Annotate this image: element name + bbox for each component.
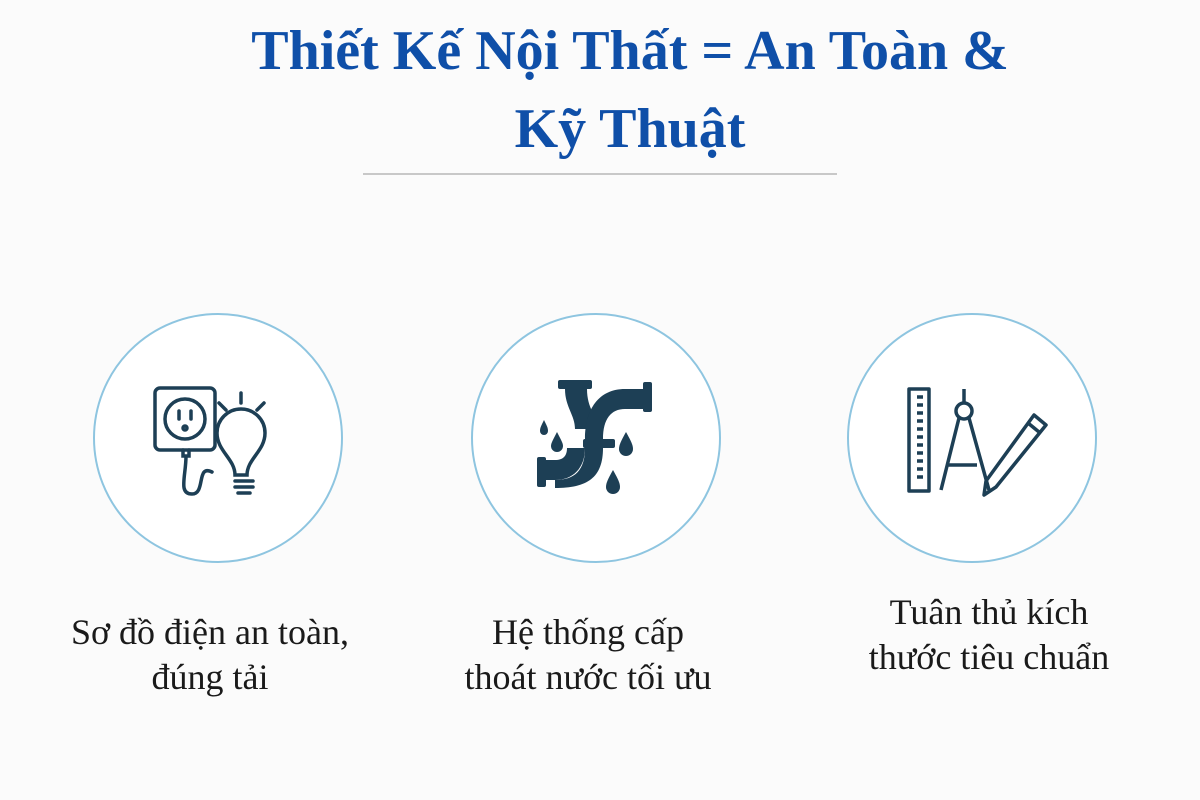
label: electrical <box>71 612 349 697</box>
title: Thiết Kế Nội Thất = An Toàn & <box>251 20 1009 82</box>
panel: electrical <box>93 313 343 563</box>
label: plumbing <box>464 612 712 697</box>
panel: plumbing <box>471 313 721 563</box>
icon: pipes with drops <box>537 380 652 494</box>
icon: ruler compass pencil <box>907 387 1048 497</box>
label: measurements <box>869 592 1109 677</box>
title: Kỹ Thuật <box>515 98 745 160</box>
panel: measurements <box>847 313 1097 563</box>
label: plumbing: Hệ thống cấp <box>492 612 684 652</box>
icon: socket and bulb <box>153 386 267 496</box>
label: measurements: Tuân thủ kích <box>890 592 1088 632</box>
label: measurements: thước tiêu chuẩn <box>869 637 1109 677</box>
label: plumbing: thoát nước tối ưu <box>464 657 712 697</box>
label: electrical: đúng tải <box>152 657 268 697</box>
title <box>251 20 1009 160</box>
label: electrical: Sơ đồ điện an toàn, <box>71 612 349 652</box>
